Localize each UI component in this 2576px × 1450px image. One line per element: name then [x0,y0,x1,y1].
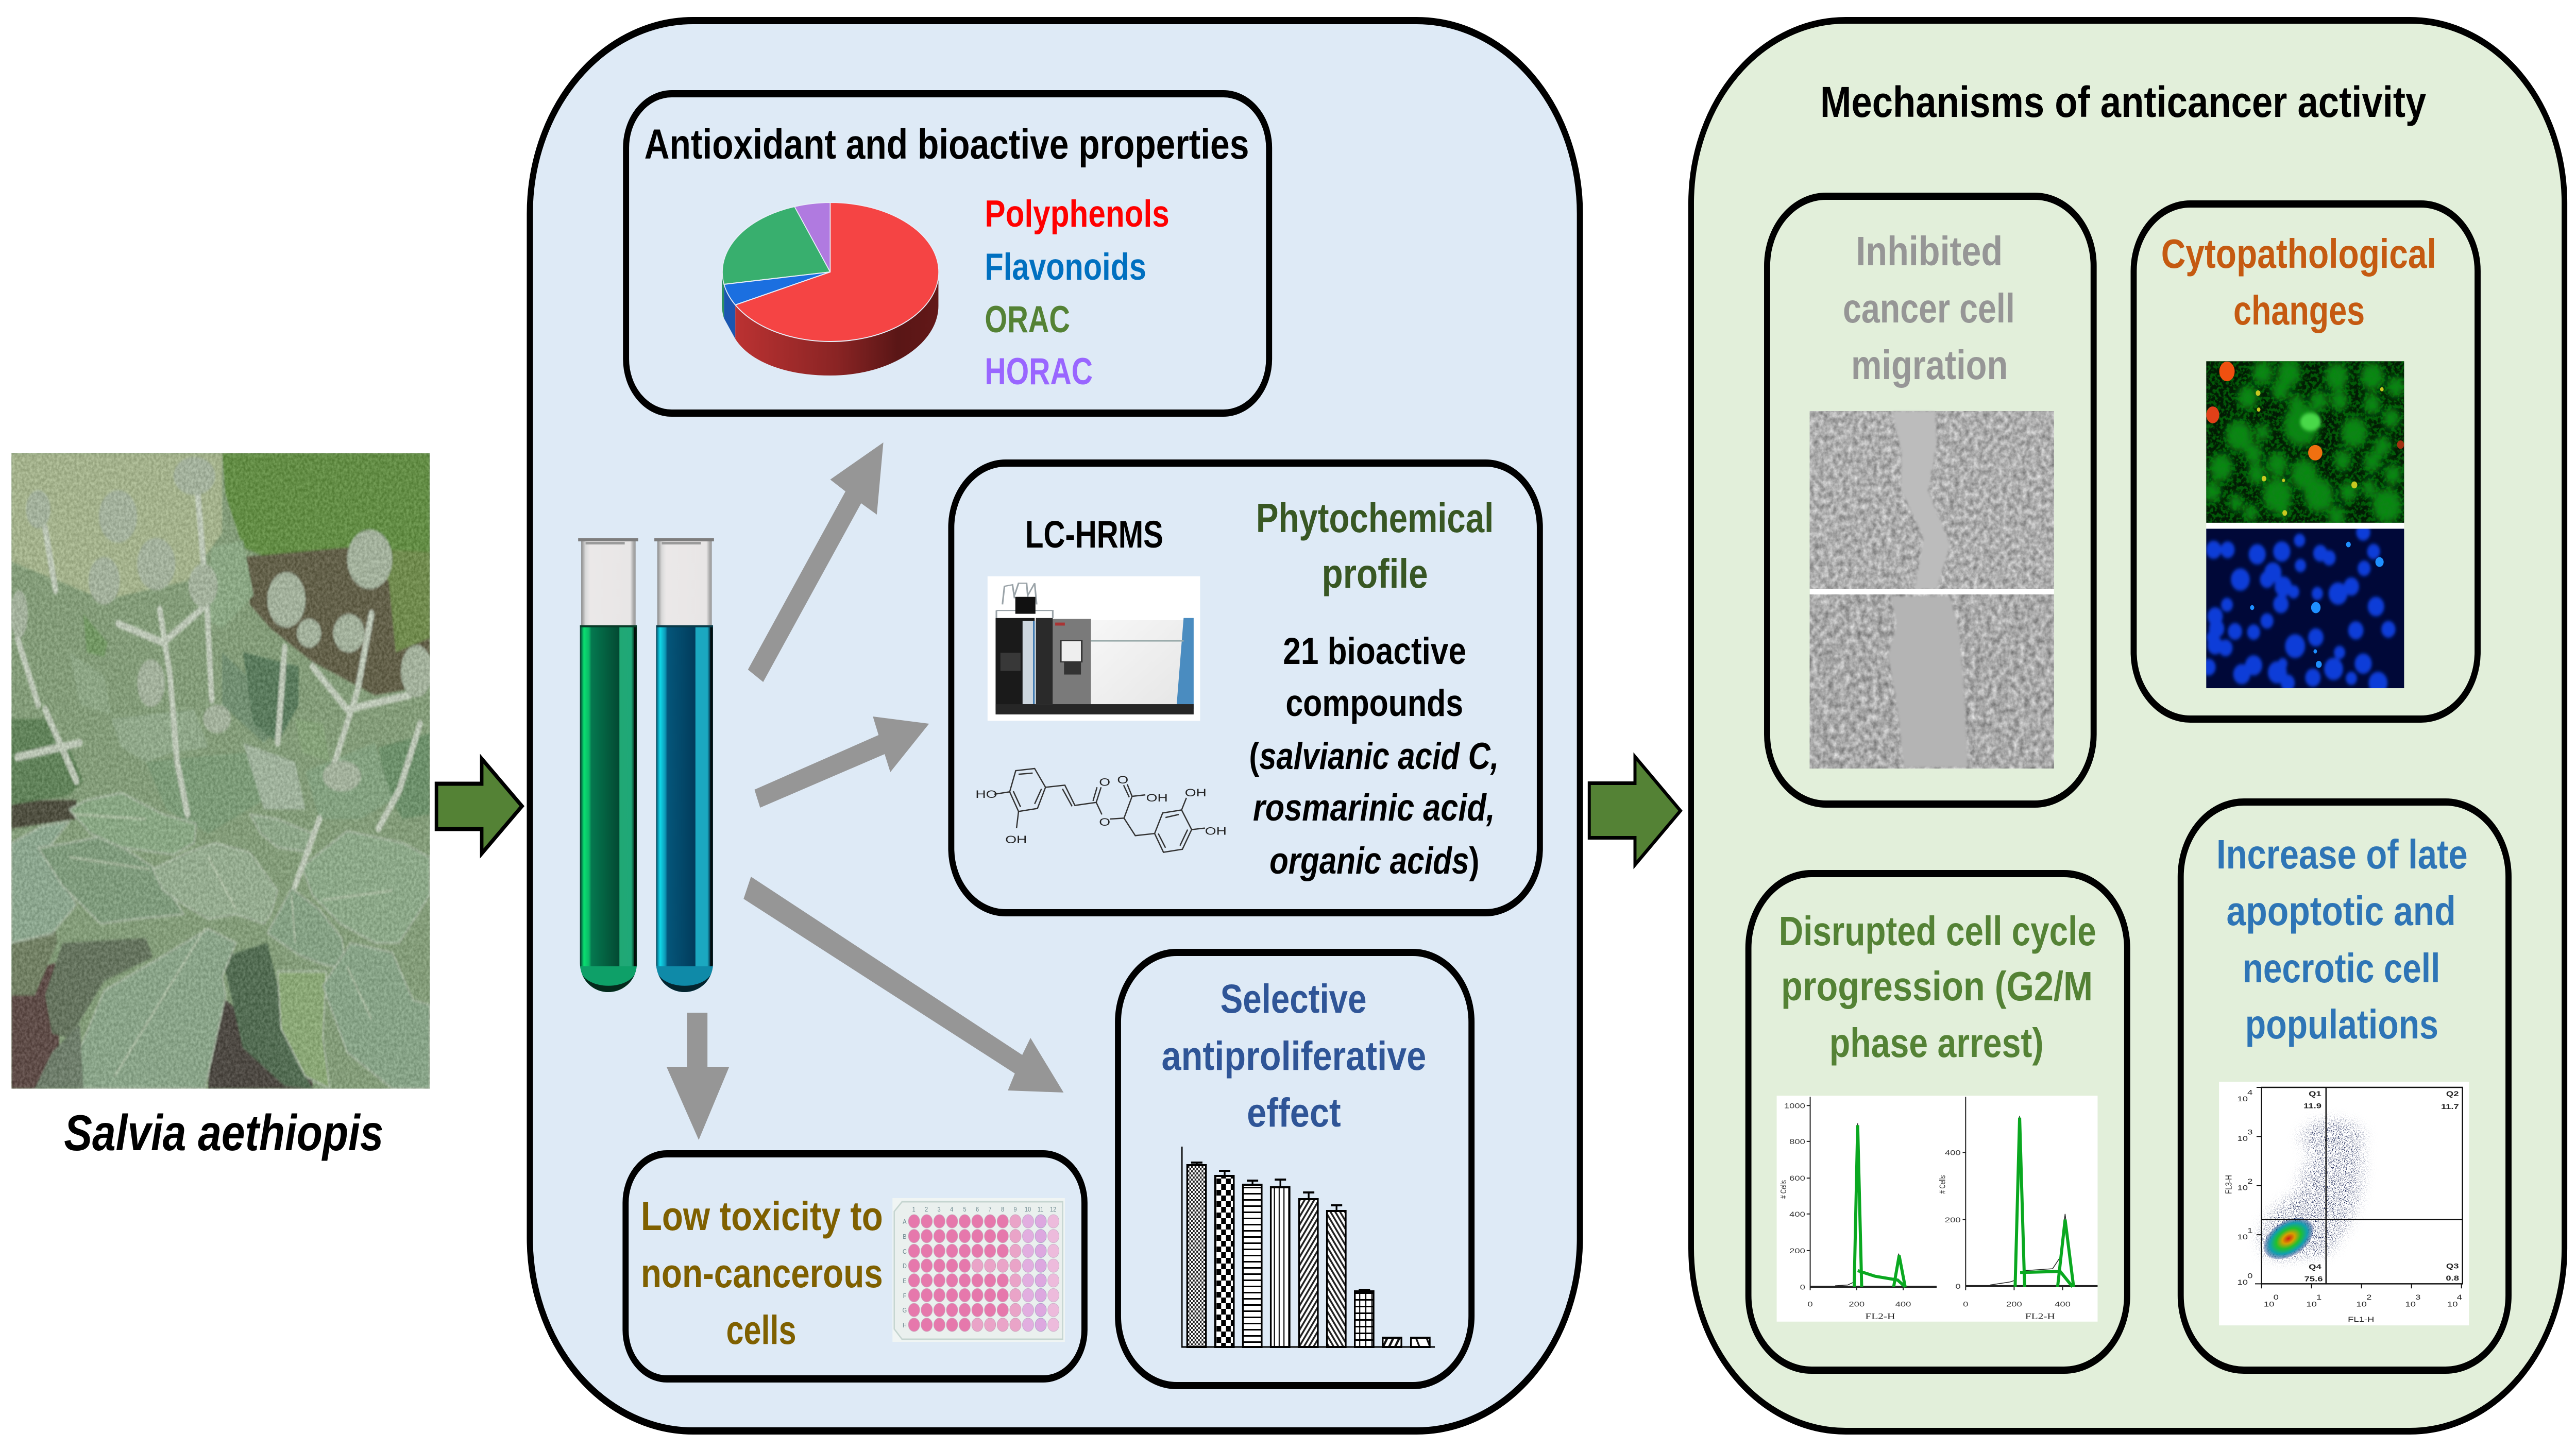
chart: flow cytometry dot plot: Q4 [2309,1263,2321,1271]
panel: mechanisms of anticancer activity [1691,21,2565,1431]
illustration: 96-well plate: 11 [1038,1205,1044,1213]
heading: inhibited migration: cancer cell [1843,285,2015,331]
illustration: 96-well plate: 12 [1050,1205,1056,1213]
chart: cell cycle histograms [1777,1096,2097,1322]
chart: flow cytometry dot plot: Q1 [2309,1090,2321,1098]
heading: phytochemical profile: profile [1321,551,1428,596]
heading: increase of late apoptotic [2216,831,2468,1047]
chart: cell cycle histograms: 600 [1789,1174,1805,1183]
image: wound healing micrographs [1810,411,2054,769]
chart: flow cytometry dot plot: 0 [2247,1272,2252,1280]
illustration: rosmarinic acid structure: HO [975,788,997,800]
chart: cell cycle histograms: 200 [1789,1247,1805,1255]
text: bioactive compounds: rosmarinic acid, [1253,787,1495,829]
illustration: 96-well plate: A [903,1218,907,1225]
arrow: to low toxicity [667,1013,729,1140]
illustration: 96-well plate: 2 [925,1205,928,1213]
chart: flow cytometry dot plot: 10 [2238,1184,2248,1192]
chart: cell cycle histograms: 800 [1789,1138,1805,1146]
chart: cell cycle histograms: 0 [1955,1283,1961,1290]
chart: cell cycle histograms: 1000 [1784,1102,1805,1110]
legend: pie categories: Polyphenols [985,193,1170,235]
chart: flow cytometry dot plot: 10 [2405,1300,2416,1308]
panel: antioxidant and bioactive properties [626,94,1269,413]
heading: selective antiproliferative [1162,977,1426,1135]
chart: cell cycle histograms: 0 [1807,1300,1813,1308]
chart: flow cytometry dot plot: FL3-H [2224,1175,2234,1194]
illustration: rosmarinic acid structure: OH [1005,833,1027,846]
panel: extract and phytochemical studies [530,21,1580,1431]
text: low toxicity: Low toxicity to [641,1194,883,1239]
illustration: 96-well plate: C [903,1248,907,1255]
illustration: 96-well plate: H [903,1321,907,1329]
heading: antioxidant: Antioxidant and bioactive properties [645,121,1249,168]
heading: disrupted cell cycle [1779,908,2096,1066]
heading: selective antiproliferative: Selective [1221,977,1367,1021]
heading: cytopathological: changes [2233,287,2365,333]
chart: flow cytometry dot plot: 2 [2247,1178,2252,1185]
illustration: 96-well plate: F [903,1292,906,1300]
text: bioactive compounds [1249,630,1499,882]
chart: flow cytometry dot plot: 10 [2238,1135,2248,1143]
text: low toxicity: cells [726,1308,796,1353]
arrow: to antiproliferative effect [743,877,1063,1093]
illustration: rosmarinic acid structure: OH [1205,825,1227,838]
chart: flow cytometry dot plot: 3 [2247,1129,2252,1136]
illustration: 96-well plate: 5 [963,1205,967,1213]
legend: pie categories: ORAC [985,299,1070,340]
chart: flow cytometry dot plot: 4 [2457,1293,2462,1302]
heading: increase of late apoptotic: populations [2245,1001,2438,1047]
label: LC-HRMS: LC-HRMS [1025,513,1163,556]
illustration: rosmarinic acid structure: OH [1185,787,1207,799]
text: bioactive compounds: organic acids) [1269,840,1479,882]
heading: inhibited migration [1843,228,2015,388]
illustration: 96-well plate [892,1198,1065,1342]
heading: increase of late apoptotic: apoptotic and [2226,888,2456,934]
chart: flow cytometry dot plot: 11.7 [2441,1103,2459,1111]
panel: phytochemical profile [951,463,1540,913]
chart: bar chart [1182,1147,1435,1347]
chart: flow cytometry dot plot: 1 [2247,1226,2252,1235]
chart: cell cycle histograms: # Cells [1938,1175,1947,1193]
chart: flow cytometry dot plot: FL1-H [2348,1316,2374,1323]
chart: flow cytometry dot plot: 4 [2247,1089,2252,1097]
panel: disrupted cell cycle [1749,874,2127,1370]
text: bioactive compounds: 21 bioactive [1283,630,1466,672]
chart: flow cytometry dot plot: 10 [2264,1300,2274,1308]
panel: low toxicity [625,1154,1084,1379]
chart: flow cytometry dot plot: 0.8 [2446,1274,2459,1282]
illustration: 96-well plate: D [903,1262,907,1270]
chart: cell cycle histograms: FL2-H [1865,1312,1895,1321]
illustration: 96-well plate: G [903,1306,907,1314]
title: mechanisms: Mechanisms of anticancer activity [1820,78,2426,126]
illustration: 96-well plate: 6 [976,1205,979,1213]
illustration: 96-well plate: 1 [912,1205,916,1213]
icon: test tubes [578,538,714,994]
panel: apoptotic and necrotic populations [2181,802,2509,1370]
text: low toxicity: non-cancerous [641,1251,883,1296]
chart: flow cytometry dot plot: Q2 [2446,1090,2459,1098]
illustration: rosmarinic acid structure: O [1099,816,1110,828]
chart: cell cycle histograms: 400 [1789,1210,1805,1218]
chart: flow cytometry dot plot: 75.6 [2304,1275,2323,1283]
chart: flow cytometry dot plot: 10 [2238,1278,2248,1286]
text: bioactive compounds: compounds [1285,683,1463,724]
chart: cell cycle histograms: 400 [1945,1149,1961,1157]
heading: increase of late apoptotic: necrotic cell [2243,945,2440,991]
chart: flow cytometry dot plot: 10 [2447,1300,2458,1308]
chart: flow cytometry dot plot: 10 [2306,1300,2317,1308]
illustration: rosmarinic acid structure: O [1099,776,1110,789]
heading: selective antiproliferative: effect [1247,1090,1341,1135]
chart: flow cytometry dot plot: 11.9 [2303,1102,2321,1110]
heading: inhibited migration: migration [1851,342,2008,388]
chart: flow cytometry dot plot: 10 [2238,1233,2248,1241]
illustration: rosmarinic acid structure [975,769,1227,852]
illustration: rosmarinic acid structure: O [1117,774,1128,786]
chart: 3D pie [722,202,939,376]
illustration: 96-well plate: 3 [938,1205,941,1213]
illustration: 96-well plate: E [903,1277,907,1285]
text: low toxicity [641,1194,883,1353]
heading: disrupted cell cycle: phase arrest) [1829,1020,2044,1066]
chart: cell cycle histograms: 200 [1945,1216,1961,1224]
legend: pie categories [985,193,1170,393]
chart: cell cycle histograms: 0 [1800,1283,1805,1291]
illustration: LC-HRMS instrument [988,576,1200,721]
panel: cytopathological changes [2133,204,2478,719]
panel: inhibited cell migration [1767,196,2094,804]
arrow: plant to extract [436,759,522,854]
caption: Salvia aethiopis: Salvia aethiopis [64,1105,383,1162]
heading: disrupted cell cycle: Disrupted cell cycle [1779,908,2096,954]
chart: cell cycle histograms: 200 [2006,1300,2022,1308]
arrow: to antioxidant properties [748,442,884,682]
chart: flow cytometry dot plot: 2 [2366,1293,2371,1302]
image: fluorescence micrographs [2202,359,2404,693]
illustration: 96-well plate: 7 [989,1205,992,1213]
photo: Salvia aethiopis plant [10,453,432,1089]
chart: flow cytometry dot plot: Q3 [2446,1262,2459,1270]
illustration: 96-well plate: 9 [1014,1205,1017,1213]
chart: flow cytometry dot plot: 0 [2274,1293,2279,1302]
chart: flow cytometry dot plot: 10 [2238,1095,2248,1103]
chart: cell cycle histograms: 200 [1849,1300,1865,1308]
illustration: 96-well plate: B [903,1233,907,1240]
illustration: 96-well plate: 8 [1001,1205,1004,1213]
chart: cell cycle histograms: 0 [1963,1300,1968,1308]
text: bioactive compounds: (salvianic acid C, [1249,736,1499,777]
heading: inhibited migration: Inhibited [1856,228,2003,274]
chart: flow cytometry dot plot: 1 [2316,1293,2321,1302]
heading: selective antiproliferative: antiproliferative [1162,1034,1426,1079]
chart: flow cytometry dot plot: 10 [2356,1300,2367,1308]
legend: pie categories: Flavonoids [985,246,1146,288]
heading: phytochemical profile [1256,495,1494,596]
heading: cytopathological [2161,231,2436,333]
chart: cell cycle histograms: # Cells [1779,1180,1788,1199]
heading: disrupted cell cycle: progression (G2/M [1781,963,2093,1009]
heading: cytopathological: Cytopathological [2161,231,2436,277]
heading: phytochemical profile: Phytochemical [1256,495,1494,541]
heading: increase of late apoptotic: Increase of late [2216,831,2468,877]
panel: selective antiproliferative effect [1118,952,1471,1386]
chart: cell cycle histograms: 400 [1895,1300,1911,1308]
chart: cell cycle histograms: FL2-H [2025,1312,2055,1321]
chart: flow cytometry dot plot: 3 [2415,1293,2420,1302]
illustration: rosmarinic acid structure: OH [1146,792,1168,804]
legend: pie categories: HORAC [985,351,1093,393]
illustration: 96-well plate: 10 [1025,1205,1031,1213]
arrow: to phytochemical profile [754,717,929,808]
arrow: to mechanisms [1589,757,1681,865]
chart: cell cycle histograms: 400 [2055,1300,2071,1308]
illustration: 96-well plate: 4 [950,1205,954,1213]
chart: flow cytometry dot plot [2219,1082,2469,1325]
